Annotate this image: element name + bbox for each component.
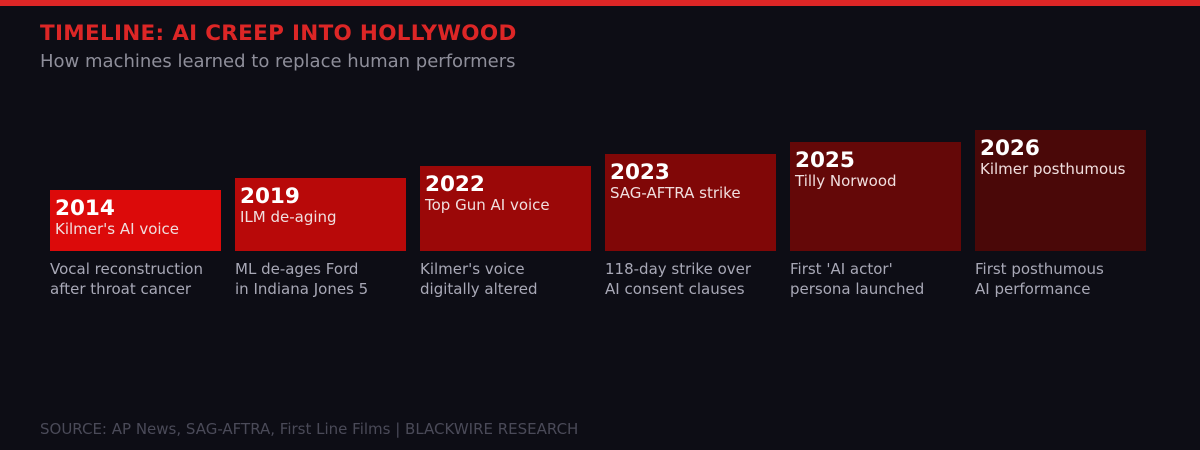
timeline item: 2022: Kilmer's voice — [420, 260, 525, 278]
timeline item: 2014 — [50, 190, 221, 298]
subtitle: How machines learned to replace human performers — [40, 51, 516, 72]
timeline item: 2025: Tilly Norwood — [795, 172, 897, 190]
timeline item: 2023: SAG-AFTRA strike — [610, 184, 741, 202]
timeline item: 2025: persona launched — [790, 280, 924, 298]
timeline item: 2019: ILM de-aging — [240, 208, 337, 226]
timeline item: 2026: Kilmer posthumous — [980, 160, 1125, 178]
timeline item: 2025: 2025 — [795, 148, 855, 173]
timeline item: 2023: AI consent clauses — [605, 280, 745, 298]
timeline item: 2014: 2014 — [55, 196, 115, 221]
timeline item: 2019: 2019 — [240, 184, 300, 209]
timeline item: 2025 — [790, 142, 961, 298]
timeline item: 2014: Vocal reconstruction — [50, 260, 203, 278]
timeline item: 2022: 2022 — [425, 172, 485, 197]
timeline item: 2019 — [235, 178, 406, 298]
timeline item: 2014: after throat cancer — [50, 280, 191, 298]
timeline item: 2026: First posthumous — [975, 260, 1104, 278]
timeline item: 2026: 2026 — [980, 136, 1040, 161]
timeline item: 2023: 118-day strike over — [605, 260, 751, 278]
timeline item: 2025: First 'AI actor' — [790, 260, 893, 278]
title: TIMELINE: AI CREEP INTO HOLLYWOOD — [40, 21, 517, 46]
timeline item: 2026: AI performance — [975, 280, 1091, 298]
timeline item: 2023 — [605, 154, 776, 298]
source: SOURCE: AP News, SAG-AFTRA, First Line Films | BLACKWIRE RESEARCH — [40, 420, 578, 438]
timeline item: 2014: Kilmer's AI voice — [55, 220, 179, 238]
timeline item: 2026 — [975, 130, 1146, 298]
timeline item: 2019: ML de-ages Ford — [235, 260, 358, 278]
timeline item: 2022: digitally altered — [420, 280, 538, 298]
timeline item: 2022 — [420, 166, 591, 298]
timeline item: 2023: 2023 — [610, 160, 670, 185]
timeline item: 2022: Top Gun AI voice — [425, 196, 550, 214]
timeline item: 2019: in Indiana Jones 5 — [235, 280, 368, 298]
